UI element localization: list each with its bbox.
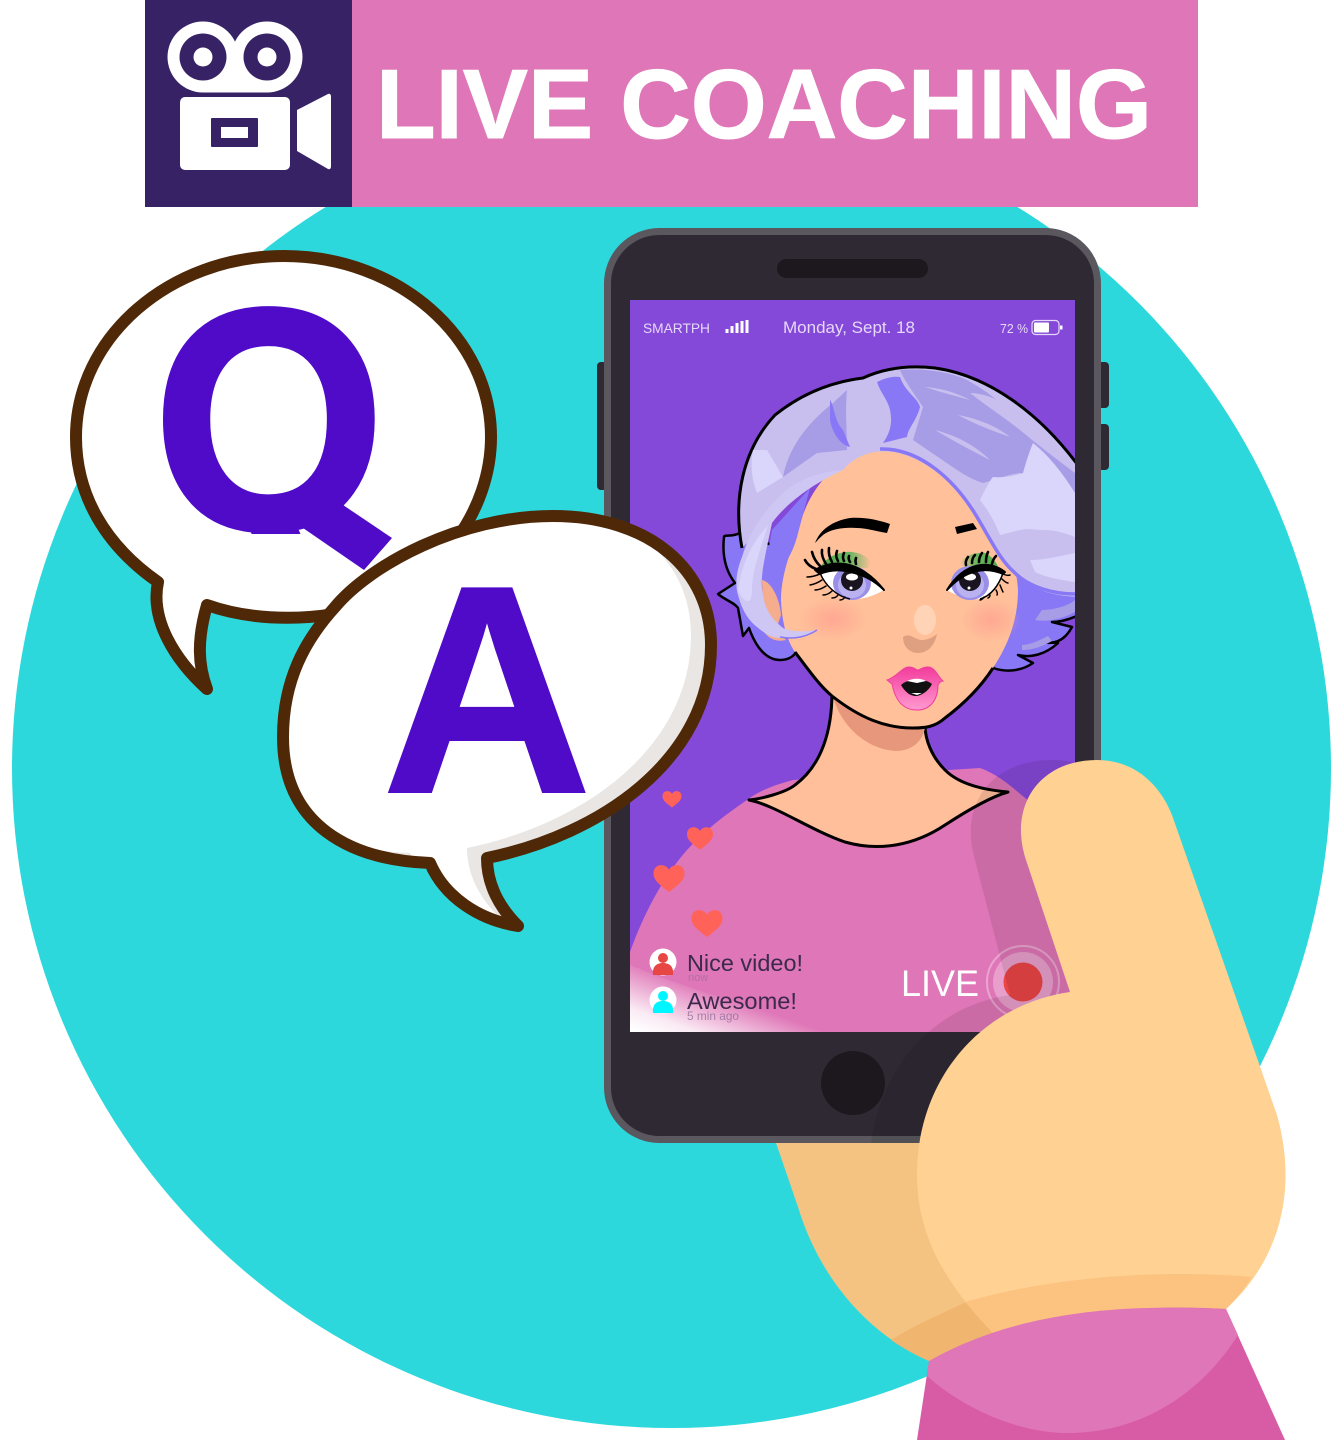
crown hair outline xyxy=(739,367,1085,548)
letter A: A xyxy=(382,524,592,855)
nose xyxy=(903,605,937,653)
live label: LIVE xyxy=(901,963,979,1004)
phone speaker xyxy=(777,259,928,278)
neck xyxy=(749,692,1008,847)
eyebrows xyxy=(815,518,977,543)
banner icon tile xyxy=(145,0,352,207)
face xyxy=(781,450,1018,728)
crown hair fill xyxy=(739,367,1085,597)
thumb and hand xyxy=(917,760,1286,1340)
record button xyxy=(987,946,1059,1018)
hair swoop inner edge xyxy=(780,630,817,638)
comments: Nice video! xyxy=(687,950,803,976)
hair light patch on swoop xyxy=(738,525,768,601)
status bar: SMARTPH xyxy=(643,320,710,336)
hair lighter band right xyxy=(970,393,1075,473)
comments: 5 min ago xyxy=(687,1009,739,1023)
hair light patch lower right xyxy=(1030,553,1075,582)
icon: battery xyxy=(1032,320,1062,334)
wrist band shadow on palm xyxy=(891,1302,1010,1361)
title: LIVE COACHING xyxy=(376,49,1152,159)
hair light patch right xyxy=(980,443,1075,537)
comments: now xyxy=(688,972,708,984)
hand: palm behind phone xyxy=(775,1140,1050,1361)
hair fringe edge xyxy=(880,449,1075,594)
hand xyxy=(891,760,1286,1440)
thumb shadow on phone xyxy=(870,760,1240,1150)
hearts xyxy=(654,791,722,937)
status bar xyxy=(644,320,1062,336)
wrist band xyxy=(965,1274,1252,1345)
A speech bubble xyxy=(263,506,711,926)
status bar: 72 % xyxy=(1000,321,1028,336)
right eye xyxy=(947,552,1010,600)
comments xyxy=(650,948,803,1023)
neck shadow xyxy=(833,697,925,751)
screen background xyxy=(630,300,1075,952)
home button xyxy=(821,1051,885,1115)
hair curl highlights xyxy=(1022,600,1075,650)
hair deep wave left xyxy=(830,400,850,447)
top hair xyxy=(736,367,1085,639)
ear xyxy=(762,580,786,641)
phone side buttons xyxy=(597,362,1109,490)
icon: cyan avatar xyxy=(650,986,676,1014)
hair deep shadow under fringe xyxy=(769,488,810,558)
back hair curls xyxy=(718,532,1085,671)
banner pink bar xyxy=(352,0,1198,207)
hair mid-tone left xyxy=(783,390,847,477)
hair deep wave centre xyxy=(877,377,920,443)
icon: red avatar xyxy=(650,948,676,976)
sleeve light area xyxy=(927,1308,1238,1433)
icon: movie camera xyxy=(168,22,331,170)
status bar: Monday, Sept. 18 xyxy=(783,318,915,337)
header banner xyxy=(145,0,1198,207)
jaw line xyxy=(795,652,993,728)
phone screen xyxy=(630,300,1090,1040)
letter Q: Q xyxy=(153,243,385,597)
comments: Awesome! xyxy=(687,988,797,1014)
blush xyxy=(810,604,856,634)
hair mid-tone right xyxy=(900,370,1075,493)
left eye xyxy=(805,548,884,600)
woman's shirt xyxy=(630,768,1090,1040)
hair streaks xyxy=(925,387,1010,460)
woman portrait xyxy=(718,367,1085,847)
Q speech bubble xyxy=(76,243,491,689)
lips xyxy=(887,667,943,710)
hair light patch left xyxy=(752,450,783,493)
left swoop strand xyxy=(736,470,843,639)
icon: signal bars xyxy=(726,320,748,333)
phone xyxy=(597,228,1109,1143)
sleeve xyxy=(917,1308,1285,1440)
bottom fade xyxy=(630,965,816,1032)
phone body xyxy=(608,232,1098,1140)
